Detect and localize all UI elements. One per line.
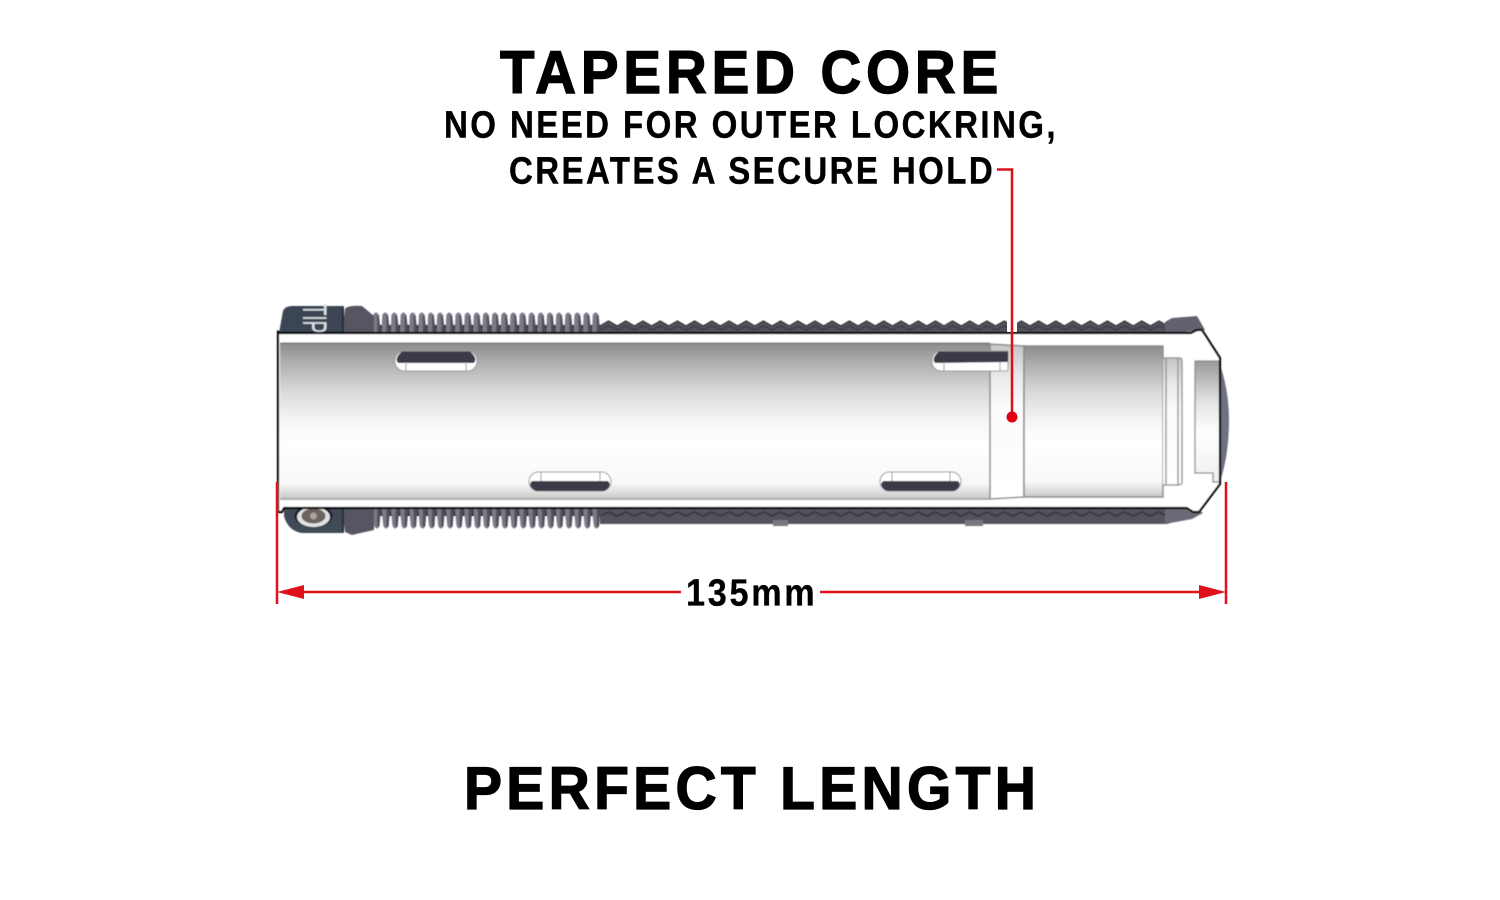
outer grip: top end shoulder bbox=[1165, 316, 1205, 334]
slot: top right bbox=[932, 351, 1008, 371]
outer grip: top ridged section bbox=[600, 318, 1175, 334]
clamp collar: bottom bbox=[342, 508, 374, 535]
dimension label: 135mm bbox=[686, 571, 815, 614]
wide inner section bbox=[1024, 346, 1163, 497]
slot: bottom left bbox=[529, 472, 611, 491]
product: grip cross-section bbox=[278, 304, 1229, 535]
inner bore gradient bbox=[280, 343, 990, 499]
heading: perfect length: PERFECT LENGTH bbox=[464, 756, 1036, 822]
groove bbox=[1163, 358, 1182, 485]
clamp seam bbox=[342, 308, 344, 532]
description text bbox=[444, 103, 1056, 192]
outer grip: bottom ribs bbox=[372, 507, 600, 530]
end bore bbox=[1195, 361, 1220, 482]
arrowheads bbox=[277, 585, 1226, 599]
clamp label: TIP bbox=[296, 304, 334, 333]
dimension line bbox=[285, 591, 1218, 593]
dimension extension lines bbox=[277, 482, 1226, 604]
description text: CREATES A SECURE HOLD bbox=[509, 149, 993, 192]
description text: NO NEED FOR OUTER LOCKRING, bbox=[444, 103, 1056, 146]
core outline bbox=[278, 330, 1220, 512]
clamp collar: top bbox=[342, 306, 374, 334]
grip bottom shoulder bbox=[1165, 507, 1203, 524]
lock clamp: top bbox=[279, 306, 344, 334]
title: tapered core: TAPERED CORE bbox=[500, 39, 998, 106]
lock clamp: bottom bbox=[284, 508, 344, 533]
outer grip: top ribs bbox=[372, 311, 600, 334]
bottom tabs bbox=[773, 520, 983, 526]
core body white bbox=[278, 330, 1220, 512]
dimension: 135mm bbox=[277, 482, 1226, 614]
clamp bolt bbox=[294, 504, 332, 528]
end dome bbox=[1216, 354, 1229, 490]
outer grip: bottom ridged section bbox=[600, 507, 1192, 524]
callout leader line with dot bbox=[997, 170, 1018, 422]
tapered section bbox=[990, 344, 1024, 499]
slot: top left bbox=[395, 351, 477, 371]
slot: bottom right bbox=[880, 472, 961, 491]
